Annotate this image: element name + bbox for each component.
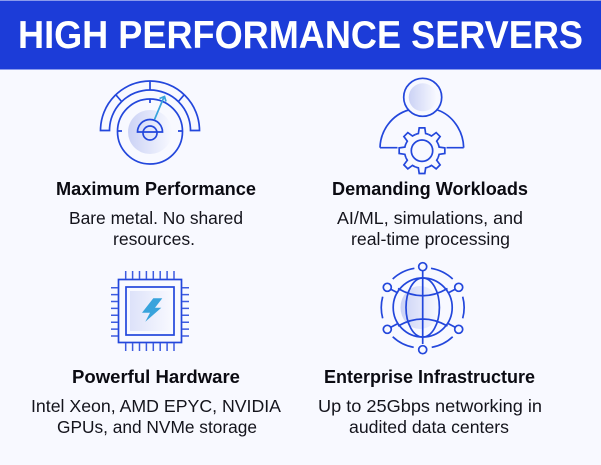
panel: powerful hardware [31,271,281,437]
description: AI/ML, simulations, and [337,208,523,228]
icon: network globe [381,263,464,354]
panel: maximum performance [56,81,256,249]
description [31,396,281,437]
heading: Powerful Hardware [72,367,240,387]
description [337,208,523,249]
icon: processor chip [111,271,189,351]
heading: Enterprise Infrastructure [324,367,535,387]
description: audited data centers [349,417,509,437]
icon: person with gear [380,78,464,174]
heading: Maximum Performance [56,179,256,199]
description: Bare metal. No shared [69,208,243,228]
description: real-time processing [351,229,510,249]
title banner [0,0,601,70]
description: GPUs, and NVMe storage [57,417,257,437]
heading: Demanding Workloads [332,179,528,199]
icon: speedometer gauge [100,81,200,164]
description [318,396,542,437]
description: resources. [113,229,195,249]
gear [399,128,445,174]
panel: enterprise infrastructure [318,263,542,437]
description [69,208,243,249]
description: Intel Xeon, AMD EPYC, NVIDIA [31,396,281,416]
panel: demanding workloads [332,78,528,249]
description: Up to 25Gbps networking in [318,396,542,416]
